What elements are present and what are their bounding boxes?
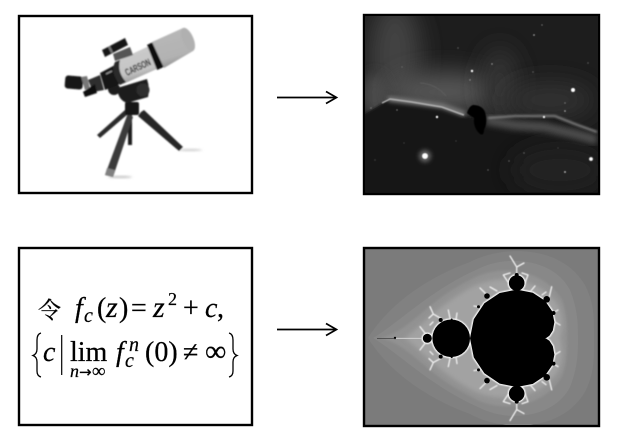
formula line 2: f (116, 337, 127, 368)
formula line 1 (38, 289, 224, 327)
horsehead (467, 105, 486, 134)
formula line 2: n (129, 334, 139, 356)
formula line 1: 令 (38, 292, 61, 325)
formula line 2 (33, 333, 237, 382)
formula line 2: lim (70, 337, 108, 368)
fractal image (374, 254, 578, 425)
telescope tube (113, 26, 198, 85)
white filaments (420, 256, 560, 421)
formula line 1: c (84, 305, 93, 327)
formula line 1: ) (119, 293, 128, 324)
formula line 1: , (217, 293, 224, 324)
stars (370, 24, 593, 173)
mount (108, 79, 150, 103)
panel: telescope photo (19, 16, 252, 193)
arrow: formula to fractal (277, 324, 336, 336)
black set (394, 273, 556, 404)
dark cloud (365, 100, 571, 137)
formula line 2: ∞ (92, 361, 106, 382)
arrow: telescope to nebula (277, 92, 336, 104)
lit ridge (388, 99, 465, 114)
formula line 1: c (205, 293, 218, 324)
tripod legs (97, 102, 183, 177)
formula line 1: f (75, 293, 86, 324)
set white fringe (423, 275, 554, 401)
telescope tube: CARSON (124, 57, 153, 79)
formula line 2: ∞ (205, 335, 226, 368)
formula line 2: n (70, 361, 79, 381)
formula line 1: + (183, 293, 199, 324)
formula line 1: 2 (168, 289, 177, 309)
icon: telescope on tripod (64, 26, 202, 178)
formula line 1: z (105, 291, 118, 324)
formula line 2: ≠ (183, 337, 198, 368)
formula line 1: = (131, 293, 147, 324)
formula line 1: ( (97, 293, 106, 324)
formula line 2: c (43, 337, 56, 368)
formula line 2: → (79, 363, 92, 381)
finder scope (102, 38, 133, 61)
formula line 2: (0) (145, 337, 178, 368)
formula line 1: z (152, 291, 165, 324)
formula line 2: c (125, 350, 134, 372)
panel: Mandelbrot set render (364, 248, 599, 426)
nebula image (365, 16, 598, 192)
panel: horsehead nebula photo (362, 14, 600, 196)
eyepiece and diagonal (64, 65, 122, 97)
antenna (377, 338, 396, 339)
panel: Mandelbrot formula (19, 248, 252, 425)
